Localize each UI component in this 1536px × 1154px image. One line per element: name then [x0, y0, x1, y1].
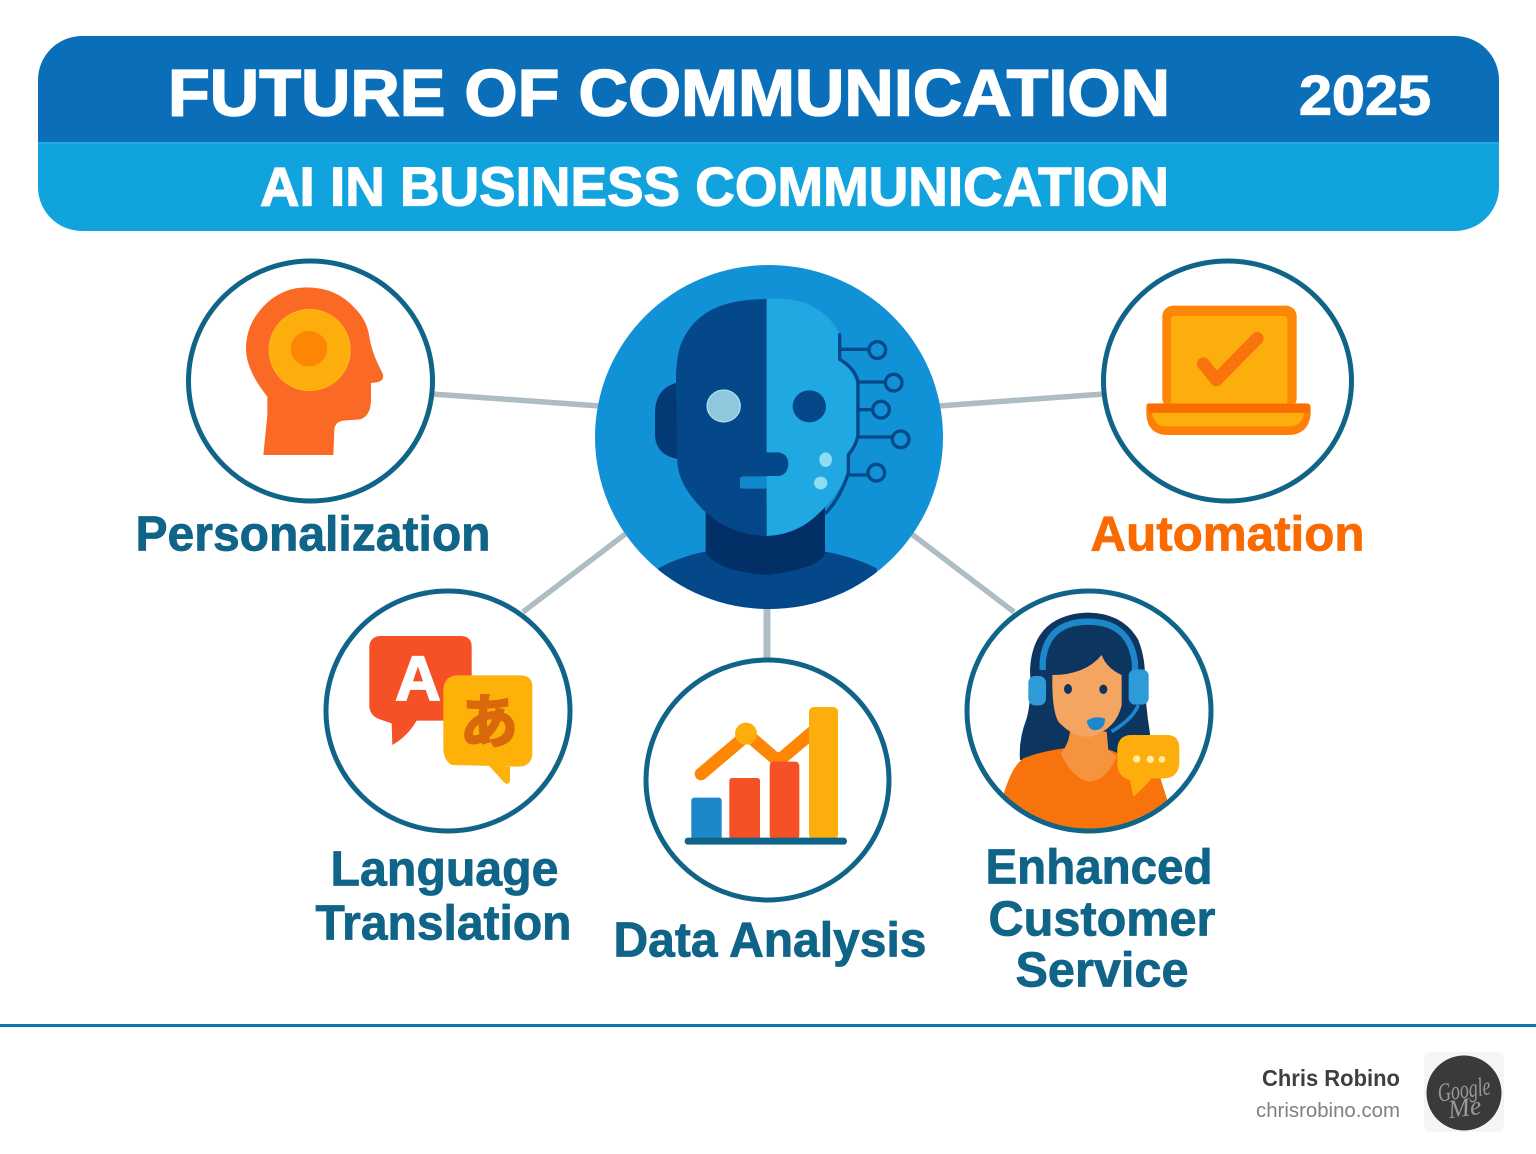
footer divider — [0, 1024, 1536, 1027]
title: FUTURE OF COMMUNICATION — [168, 56, 1170, 130]
dark half of face — [676, 299, 767, 536]
label: Customer — [988, 892, 1216, 946]
node: personalization — [136, 261, 490, 562]
label: Automation — [1090, 508, 1364, 562]
icon: laptop with check — [1146, 306, 1311, 435]
node: automation — [1090, 261, 1364, 562]
label — [316, 842, 572, 950]
icon: translation bubbles: A — [395, 644, 441, 714]
label: Enhanced — [986, 840, 1212, 894]
eyes — [707, 390, 740, 422]
label: Service — [1016, 944, 1188, 998]
label: Translation — [316, 896, 572, 950]
mouth — [740, 476, 767, 489]
icon: translation bubbles: あ — [460, 690, 518, 755]
author site: chrisrobino.com — [1256, 1100, 1400, 1122]
subtitle: AI IN BUSINESS COMMUNICATION — [260, 156, 1169, 218]
central AI head icon — [595, 265, 943, 613]
nose — [766, 452, 788, 476]
label: Language — [330, 842, 558, 896]
logo badge — [1424, 1052, 1504, 1132]
icon: chart — [685, 707, 847, 845]
icon: head with target — [246, 287, 383, 455]
cheek dots — [819, 452, 832, 467]
label — [986, 840, 1216, 998]
neck — [706, 507, 825, 575]
ear — [655, 383, 677, 459]
author name: Chris Robino — [1262, 1065, 1400, 1091]
logo badge: Google — [1436, 1071, 1492, 1108]
footer author block — [1256, 1052, 1504, 1132]
connector lines — [432, 394, 1104, 658]
logo badge: Me — [1445, 1091, 1483, 1124]
year: 2025 — [1299, 64, 1431, 126]
icon: support agent — [1003, 613, 1179, 843]
label: Personalization — [136, 508, 490, 562]
shoulders — [653, 552, 880, 613]
header banner — [38, 36, 1499, 231]
node: language translation — [316, 591, 572, 950]
node: enhanced customer service — [967, 591, 1216, 998]
node: data analysis — [614, 660, 926, 968]
circuit — [825, 333, 909, 514]
light half of face — [767, 299, 856, 536]
label: Data Analysis — [614, 914, 926, 968]
icon: translation bubbles — [369, 636, 532, 784]
